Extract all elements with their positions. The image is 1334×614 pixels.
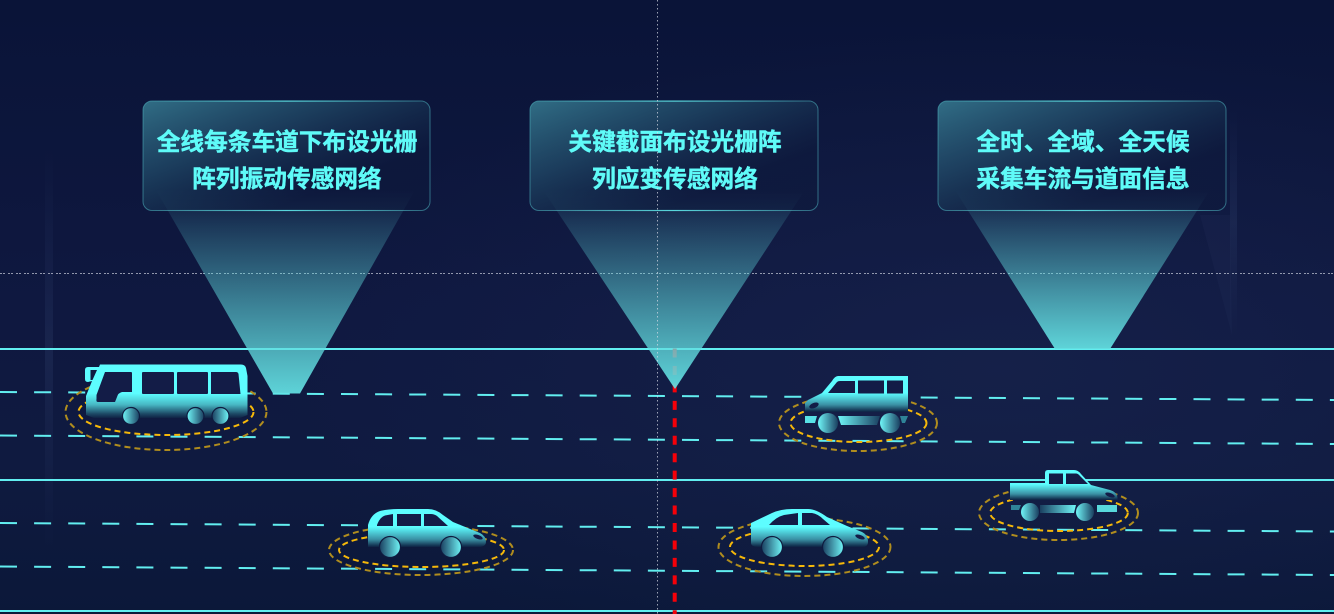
callout 3: 全时、全域、全天候 [976,129,1190,156]
callout 2 [530,100,818,211]
road: solid lane lines [0,349,1334,611]
horizontal dotted guide [0,272,1334,274]
callout 2: 关键截面布设光栅阵 [568,129,782,156]
callout 2: 列应变传感网络 [592,165,758,193]
road: dashed lane lines [0,392,1334,575]
sedan car with sensing rings [718,509,890,576]
callout 1 [143,100,430,211]
callout 1: 阵列振动传感网络 [192,165,382,193]
red dashed sensing section [673,348,677,614]
bus with sensing rings [66,364,266,450]
callout 1: 全线每条车道下布设光栅 [157,129,417,156]
hatchback car with sensing rings [329,509,513,575]
callout 3 [938,100,1226,211]
light beam 2 [543,190,805,389]
vertical dotted guide [656,0,658,614]
callout 3: 采集车流与道面信息 [976,166,1190,193]
pickup truck with sensing rings [979,470,1138,540]
van with sensing rings [779,376,937,451]
light beam 1 [156,190,415,394]
light beam 3 [955,190,1210,349]
